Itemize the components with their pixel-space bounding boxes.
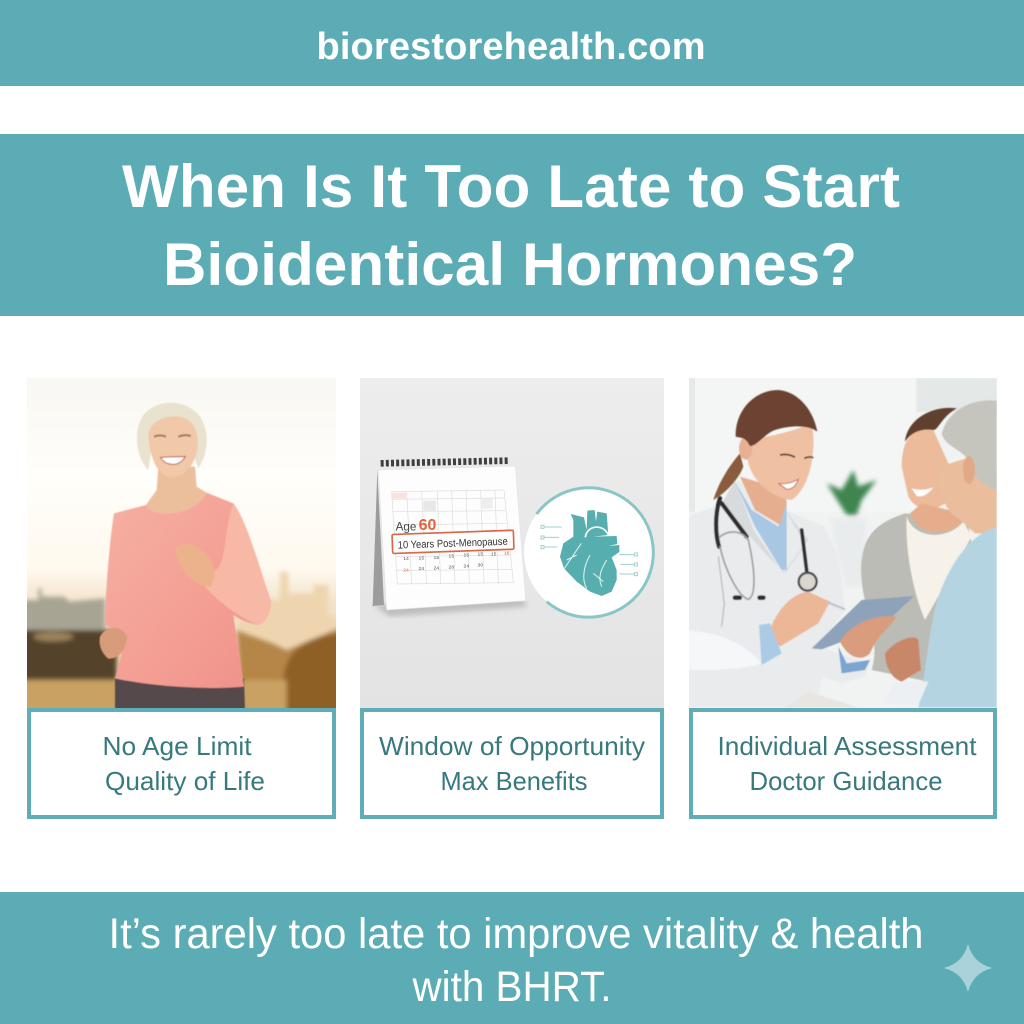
calendar numbers: 15 [464, 553, 469, 559]
panel: window of opportunity [360, 378, 664, 817]
calendar back [373, 470, 384, 606]
caption: window of opportunity: Window of Opportunity [379, 731, 645, 761]
shirt torso and arm [105, 493, 271, 688]
footer band: conclusion: with BHRT. [412, 963, 612, 1011]
calendar numbers: 15 [434, 555, 439, 561]
heart circle [524, 488, 653, 617]
calendar page [378, 466, 526, 610]
title band: Bioidentical Hormones? [163, 231, 857, 298]
heart [560, 510, 619, 596]
hands [174, 544, 215, 587]
doctor: blue shirt [735, 482, 787, 570]
calendar numbers: 28 [449, 564, 454, 570]
illustration: calendar and heart: 10 Years Post-Menopause [398, 536, 508, 552]
calendar numbers: 16 [504, 551, 510, 557]
spiral binding [381, 461, 508, 463]
clasped hands [885, 637, 921, 682]
photo: woman jogging at sunset [27, 378, 336, 708]
second woman: head [902, 429, 948, 509]
title band: When Is It Too Late to Start [122, 153, 900, 220]
caption: no age limit: No Age Limit [102, 731, 252, 761]
caption: window of opportunity [362, 710, 662, 817]
calendar numbers: 15 [491, 551, 497, 557]
panel: no age limit [10, 378, 350, 817]
pants [115, 678, 245, 710]
calendar numbers [404, 552, 510, 572]
illustration: calendar and heart [360, 378, 664, 709]
calendar numbers: 15 [478, 552, 483, 558]
forearm sleeve [205, 503, 271, 625]
doctor: hand under tablet [840, 616, 897, 658]
footer band: conclusion [0, 892, 1024, 1024]
caption: window of opportunity: Max Benefits [440, 766, 588, 796]
doctor: hand and pen arm [768, 592, 830, 647]
footer band: conclusion: It’s rarely too late to improve vitality & health [108, 910, 924, 958]
calendar numbers: 24 [403, 567, 409, 573]
calendar numbers: 24 [419, 566, 424, 572]
calendar numbers: 15 [419, 555, 424, 561]
caption: no age limit [29, 710, 334, 817]
tablet [812, 596, 914, 649]
calendar numbers: 30 [478, 563, 483, 569]
face [148, 416, 198, 477]
calendar numbers: 24 [464, 563, 469, 569]
calendar numbers: 14 [403, 556, 409, 562]
header band: website [0, 0, 1024, 86]
plant and pot [824, 468, 878, 519]
caption: individual assessment [691, 710, 995, 817]
stethoscope [716, 498, 817, 599]
icon: sparkle [944, 944, 992, 992]
eyes and smile [154, 435, 191, 437]
caption: individual assessment: Individual Assessment [718, 731, 977, 761]
highlighted text box [392, 530, 514, 553]
caption: no age limit: Quality of Life [105, 766, 265, 796]
neck [146, 467, 207, 513]
age label: Age [396, 521, 416, 534]
calendar shadow [373, 598, 527, 617]
hair [137, 403, 207, 470]
third woman: head, hair, shirt [939, 457, 997, 533]
second woman: cardigan and top [861, 513, 972, 682]
calendar grid [392, 490, 513, 584]
heart annotation lines [541, 525, 637, 576]
doctor: coat [688, 480, 870, 707]
doctor: ponytail [713, 453, 743, 500]
calendar numbers: 15 [449, 553, 454, 559]
photo: doctor with patients [688, 378, 997, 709]
caption: individual assessment: Doctor Guidance [750, 766, 942, 796]
header band: website: biorestorehealth.com [316, 26, 706, 68]
calendar numbers: 24 [434, 565, 439, 571]
doctor: hair [736, 390, 817, 446]
illustration: calendar and heart: 60 [419, 517, 437, 534]
title band [0, 134, 1024, 316]
panel: individual assessment [688, 378, 997, 817]
doctor: neck and face [740, 477, 787, 525]
